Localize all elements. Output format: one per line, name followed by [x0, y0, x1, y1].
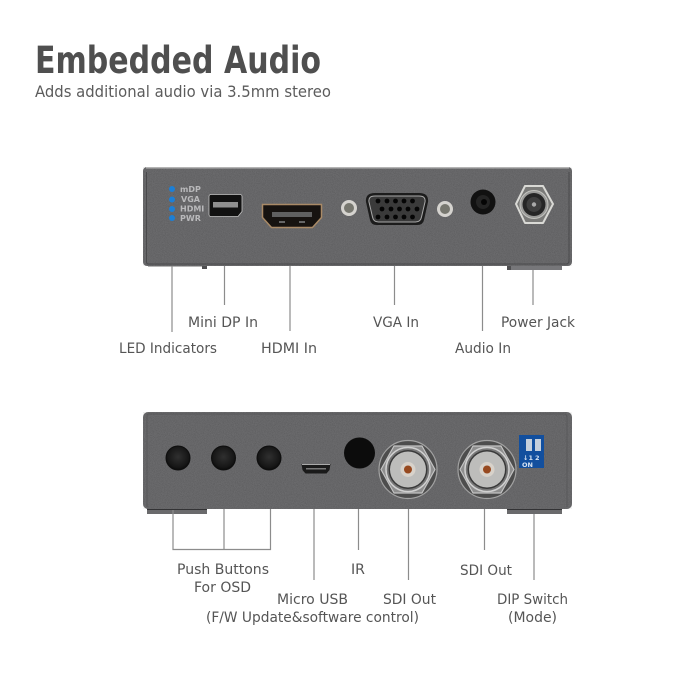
label: Power Jack: Power Jack [501, 315, 576, 331]
device body [143, 412, 572, 509]
panel: front device [143, 167, 572, 270]
label: DIP Switch: (Mode) [508, 610, 557, 626]
LED indicators [169, 185, 204, 223]
mini DP port [209, 194, 242, 216]
label: SDI Out right: SDI Out [460, 563, 512, 579]
label: Micro USB: Micro USB [277, 592, 348, 608]
label: LED Indicators: LED Indicators [119, 341, 217, 357]
subtitle: Adds additional audio via 3.5mm stereo [35, 82, 331, 101]
DIP switch: ↓1 [523, 454, 533, 462]
panel: rear device [143, 412, 572, 514]
SDI connector 2 [458, 440, 516, 498]
DIP switch: 2 [535, 454, 540, 462]
label: Micro USB [206, 592, 419, 626]
audio jack [470, 190, 496, 214]
LED indicators: mDP [180, 185, 201, 194]
DIP switch: ON [522, 461, 533, 469]
label: Push Buttons For OSD [177, 562, 269, 596]
title: Embedded Audio [35, 39, 321, 82]
label: Micro USB: (F/W Update&software control) [206, 610, 419, 626]
label: HDMI In: HDMI In [261, 341, 317, 357]
DIP switch [519, 435, 544, 469]
callout lines: front [172, 266, 533, 332]
label: Push Buttons For OSD: Push Buttons [177, 562, 269, 578]
label: VGA In: VGA In [373, 315, 419, 331]
device feet [148, 264, 562, 270]
device body [143, 167, 572, 266]
label: SDI Out left: SDI Out [383, 592, 436, 608]
screw right [437, 201, 453, 217]
micro USB port [302, 464, 330, 474]
SDI connector 1 [379, 440, 437, 498]
label: Audio In: Audio In [455, 341, 511, 357]
label: Push Buttons For OSD: For OSD [194, 580, 251, 596]
push buttons [166, 446, 281, 470]
IR window [344, 438, 375, 468]
label: IR: IR [351, 562, 365, 578]
label: Mini DP In: Mini DP In [188, 315, 258, 331]
VGA port [366, 193, 428, 225]
label: DIP Switch: DIP Switch [497, 592, 568, 608]
screw left [341, 200, 357, 216]
LED indicators: HDMI [180, 204, 204, 214]
callout lines: rear [173, 509, 534, 580]
LED indicators: PWR [180, 214, 201, 223]
label: DIP Switch [497, 592, 568, 626]
LED indicators: VGA [181, 195, 201, 204]
device feet [147, 506, 562, 514]
HDMI port [262, 204, 322, 228]
power jack [516, 186, 553, 223]
